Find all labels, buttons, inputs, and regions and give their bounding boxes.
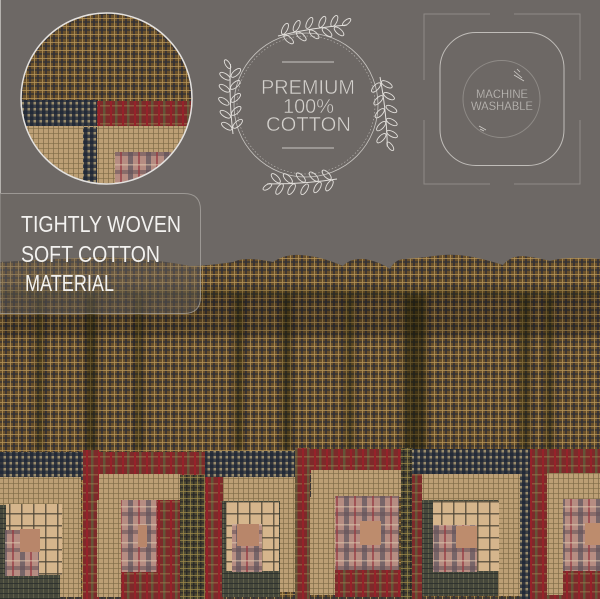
callout: tightly woven soft cotton material: SOFT COTTON [21,241,160,267]
callout: tightly woven soft cotton material: MATERIAL [25,270,114,296]
callout: tightly woven soft cotton material [0,194,200,314]
badge: premium cotton wreath: 100% [283,96,334,118]
left edge highlight [0,0,1,193]
block 1 [0,450,99,599]
block 5 [412,449,530,599]
curtain folds [0,290,600,451]
block 2 [97,452,224,599]
quilted patchwork border [0,448,600,599]
block 3 [205,448,310,599]
badge: machine washable: MACHINE [476,87,528,101]
badge: machine washable: WASHABLE [471,99,533,113]
curtain [0,255,600,599]
badge: premium cotton wreath: COTTON [266,114,351,136]
badge: premium cotton wreath: PREMIUM [261,77,355,99]
curtain body fabric [0,255,600,599]
callout: tightly woven soft cotton material: TIGHTLY WOVEN [21,211,181,237]
block 6 [530,449,600,599]
badge: premium cotton wreath [216,10,402,199]
block 4 [308,448,413,599]
badge: machine washable [424,14,580,184]
fabric close-up circle [20,12,193,185]
